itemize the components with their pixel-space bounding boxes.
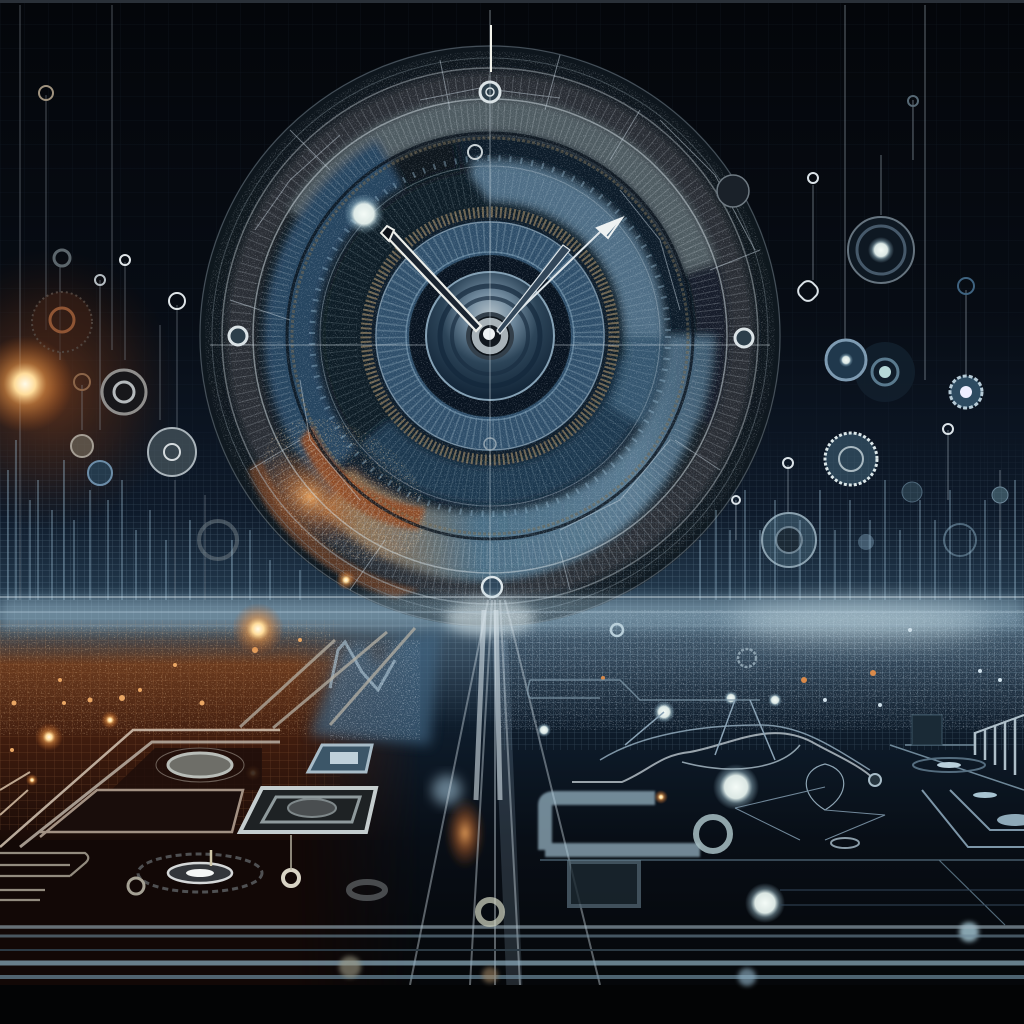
- clock ornaments: [229, 10, 753, 600]
- faceted sketch lines: [210, 55, 770, 590]
- sparks left: [10, 638, 302, 752]
- disc speckle: [205, 51, 775, 621]
- hub: [426, 272, 554, 400]
- clock hands: [381, 218, 622, 334]
- glow lights: [26, 603, 979, 942]
- city haze: [0, 430, 1024, 740]
- ground: [0, 596, 1024, 990]
- orange speckle: [237, 389, 453, 591]
- central perspective road: [240, 600, 600, 1000]
- hanging pins right: [732, 5, 1000, 560]
- clock disc: [187, 33, 793, 639]
- soft colour bands: [187, 33, 793, 639]
- orange nebula: [300, 425, 425, 530]
- sparks right: [601, 624, 1002, 707]
- pins and medallions left: [0, 5, 237, 600]
- bottom rails: [0, 900, 1024, 1024]
- circuit panels right: [528, 680, 1024, 925]
- blue peak region: [310, 630, 440, 745]
- circuit panels left: [0, 730, 385, 900]
- tick rings and lines: [200, 46, 780, 626]
- medallions right: [762, 217, 1008, 567]
